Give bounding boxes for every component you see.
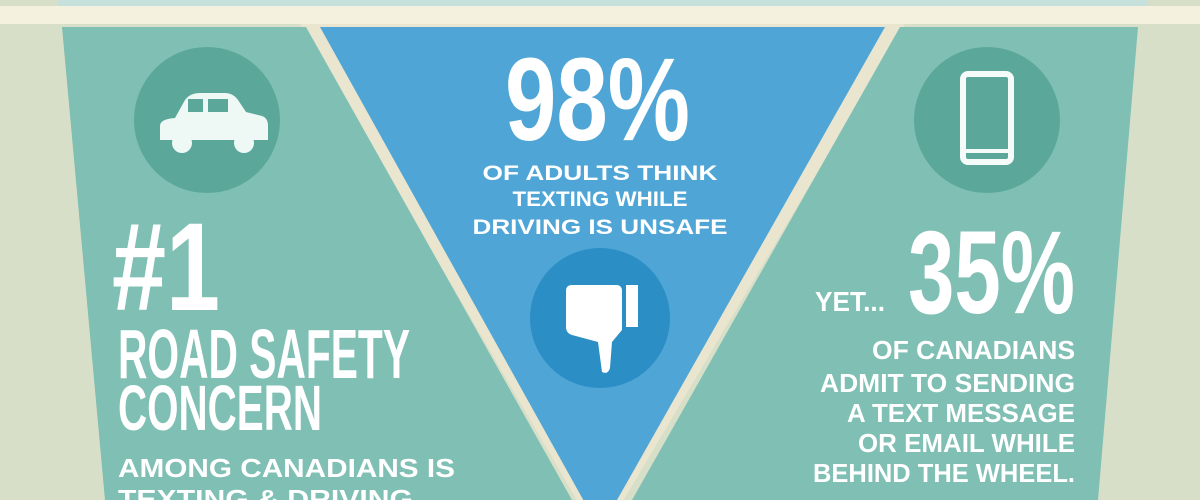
text: of canadians admit: ADMIT TO SENDING [820,368,1075,398]
panel: right teal [632,27,1138,500]
text: yet 35%: 35% [908,207,1075,339]
text: road safety concern: ROAD SAFETY [118,315,410,393]
text: road safety concern: CONCERN [118,372,322,444]
heading: #1: #1 [112,198,220,337]
text: of canadians admit [813,335,1075,488]
text: of canadians admit: OF CANADIANS [872,335,1075,365]
top banner [0,0,1200,24]
panel: blue triangle [320,27,885,500]
text: adults think unsafe: TEXTING WHILE [512,188,688,211]
text: adults think unsafe [472,162,728,239]
icon: thumbs down [530,248,670,388]
icon: car circle [134,47,280,193]
text: of canadians admit: A TEXT MESSAGE [847,398,1075,428]
text: of canadians admit: BEHIND THE WHEEL. [813,458,1075,488]
text: yet 35% [815,207,1075,339]
text: among canadians [118,453,455,500]
text: among canadians: AMONG CANADIANS IS [118,453,455,483]
panel: left teal [62,27,572,500]
text: adults think unsafe: DRIVING IS UNSAFE [472,216,728,239]
stat: 98%: 98% [505,34,690,166]
text: road safety concern [118,315,410,444]
cream divider behind triangle [300,24,905,500]
text: yet 35%: YET... [815,286,885,317]
text: adults think unsafe: OF ADULTS THINK [482,162,718,185]
icon: phone circle [914,47,1060,193]
text: of canadians admit: OR EMAIL WHILE [858,428,1075,458]
